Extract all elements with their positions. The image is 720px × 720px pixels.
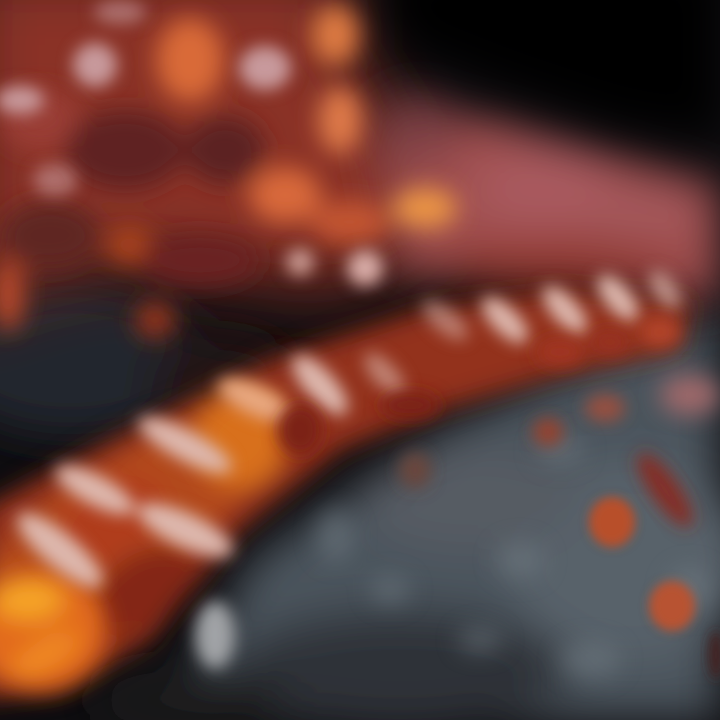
dark mid-left recess	[0, 285, 290, 435]
pale blurred spot near band base	[195, 601, 235, 669]
orange beads on surface	[399, 375, 720, 679]
pale spines in upper mass	[0, 0, 383, 286]
pink ridge receding to the right	[370, 95, 720, 300]
top right black	[375, 0, 720, 140]
grey surface	[90, 310, 720, 720]
glowing orange end of band	[0, 570, 106, 690]
surface speckles	[317, 436, 712, 678]
orange highlights in upper mass	[0, 5, 457, 338]
main diagonal band	[0, 290, 690, 700]
red shadows between stripes	[278, 318, 680, 456]
upper spiny mass	[0, 0, 450, 320]
white stripes on band	[8, 266, 687, 598]
